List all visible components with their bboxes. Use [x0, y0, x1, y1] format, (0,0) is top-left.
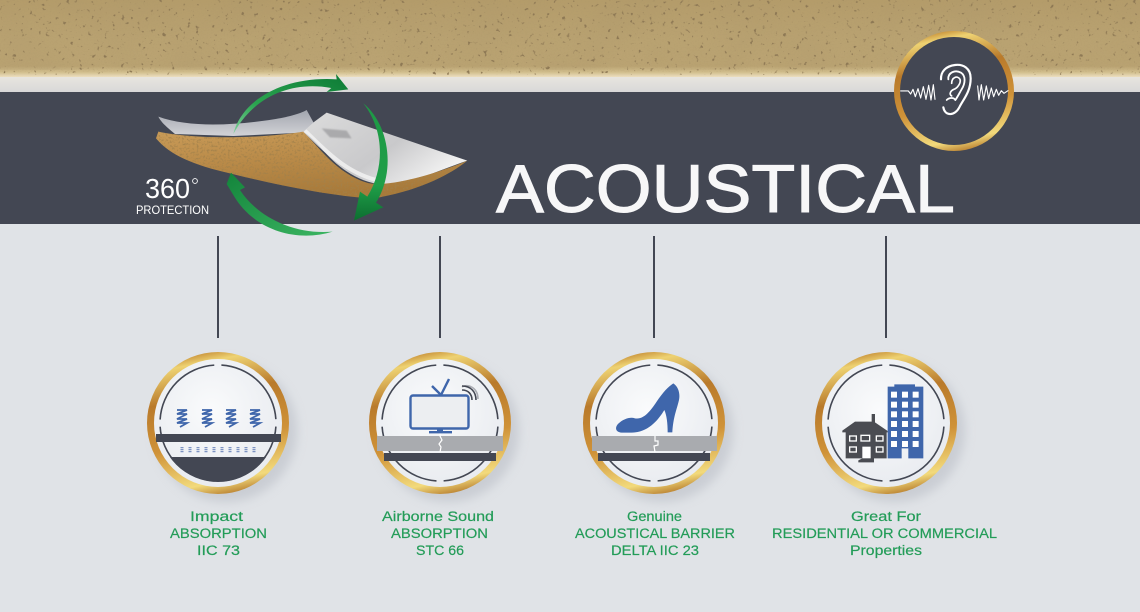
caption: residential or commercial: RESIDENTIAL OR COMMERCIAL — [772, 526, 997, 542]
arrow: top — [233, 74, 348, 134]
caption: impact absorption: ABSORPTION — [170, 526, 267, 542]
caption: airborne sound absorption: ABSORPTION — [391, 526, 488, 542]
icon: residential house and commercial tower — [815, 352, 965, 502]
caption: acoustical barrier: Genuine — [627, 509, 682, 525]
caption: airborne sound absorption: Airborne Sound — [382, 509, 494, 525]
360 degree protection label: 360 — [145, 173, 190, 204]
icon: ear in gold ring — [894, 31, 1014, 151]
arrow: right — [354, 103, 388, 221]
caption: impact absorption: Impact — [190, 509, 243, 525]
dark title banner — [0, 92, 1140, 224]
icon: impact absorption springs — [147, 352, 297, 502]
caption: airborne sound absorption: STC 66 — [416, 543, 464, 559]
icon: high heel on floor — [583, 352, 733, 502]
cork layer — [156, 132, 467, 198]
caption: impact absorption: IIC 73 — [197, 543, 240, 559]
360 degree protection label — [136, 173, 209, 217]
grey back membrane — [158, 110, 314, 136]
360 degree protection label: PROTECTION — [136, 205, 209, 217]
title: ACOUSTICAL: ACOUSTICAL — [496, 151, 955, 227]
caption: impact absorption — [170, 509, 267, 559]
caption: airborne sound absorption — [382, 509, 494, 559]
white peeled membrane — [303, 113, 467, 185]
caption: acoustical barrier — [575, 509, 735, 559]
icon: airborne sound television — [369, 352, 519, 502]
laminated cork underlayment sample with green rotation arrows — [156, 74, 467, 236]
caption: acoustical barrier: ACOUSTICAL BARRIER — [575, 526, 735, 542]
caption: residential or commercial: Properties — [850, 543, 922, 559]
caption: residential or commercial: Great For — [851, 509, 921, 525]
sand-coloured textured underlayment strip — [0, 0, 1140, 92]
crease highlight and shadow — [305, 131, 383, 182]
caption: acoustical barrier: DELTA IIC 23 — [611, 543, 699, 559]
arrow: bottom — [227, 173, 333, 236]
caption: residential or commercial — [772, 509, 997, 559]
connector lines — [218, 236, 886, 338]
